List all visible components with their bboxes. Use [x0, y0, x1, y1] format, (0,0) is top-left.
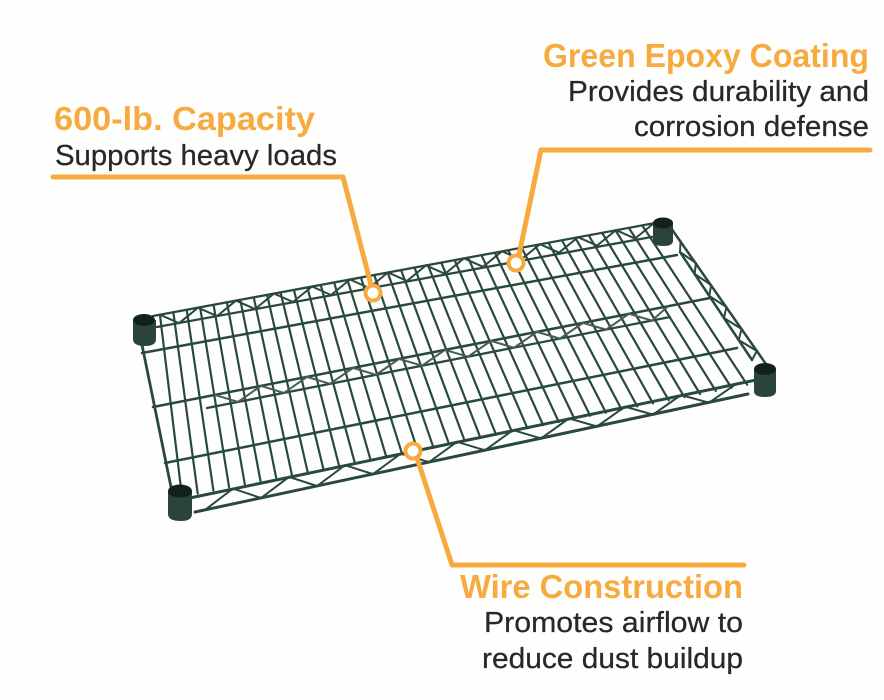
callout text: Provides durability and: [568, 76, 869, 108]
wire shelf: [141, 223, 768, 512]
callout: Green Epoxy Coating: [508, 37, 870, 270]
callout text: Promotes airflow to: [484, 607, 743, 639]
front truss: [185, 380, 756, 512]
callout text line 2: reduce dust buildup: [482, 643, 743, 675]
left rail: [141, 340, 172, 492]
marker: [406, 444, 420, 458]
leader line: [519, 150, 870, 255]
callout: 600-lb. Capacity: [53, 100, 380, 300]
leader line: [417, 458, 744, 565]
right truss: [671, 228, 768, 367]
marker: [366, 286, 380, 300]
callout heading: Wire Construction: [460, 568, 743, 605]
marker: [508, 256, 524, 270]
callout heading: 600-lb. Capacity: [54, 100, 316, 137]
leader line: [53, 177, 371, 285]
callout: Wire Construction: [406, 444, 744, 675]
post: front right: [754, 363, 776, 397]
slats: [160, 226, 747, 497]
post: back left: [133, 314, 156, 346]
cross bars: [142, 255, 737, 463]
callout text line 2: corrosion defense: [634, 111, 869, 143]
callout heading: Green Epoxy Coating: [543, 37, 869, 74]
middle truss: [207, 306, 670, 408]
callout text: Supports heavy loads: [55, 140, 337, 172]
post: front left: [168, 484, 192, 521]
back truss: [153, 223, 657, 327]
post: back right: [653, 218, 673, 246]
